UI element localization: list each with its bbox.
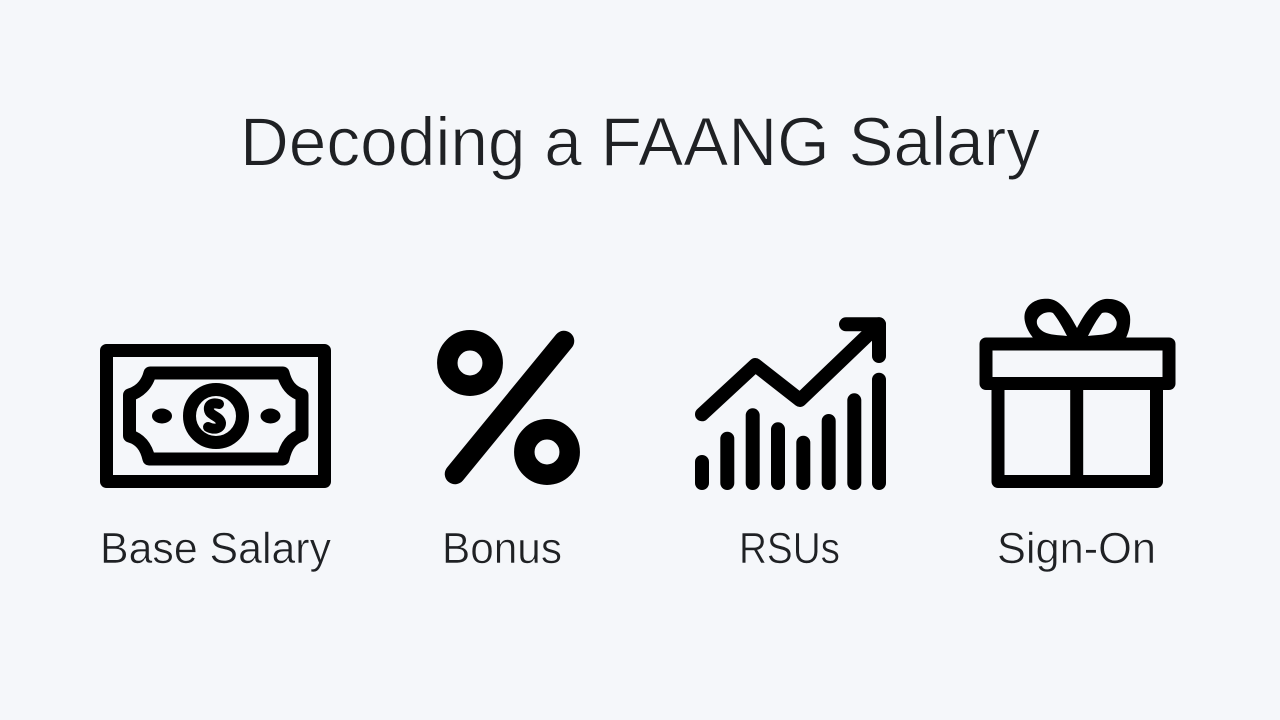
label: base salary: Base Salary — [100, 524, 331, 573]
icon: gift box for sign-on — [986, 299, 1169, 482]
title: Decoding a FAANG Salary — [240, 104, 1040, 180]
icon: banknote for base salary — [106, 350, 324, 482]
label: sign-on: Sign-On — [997, 524, 1156, 573]
label: bonus: Bonus — [442, 524, 562, 573]
icon: percent sign for bonus — [447, 340, 570, 475]
label: RSUs: RSUs — [739, 524, 840, 573]
icon: rising chart for RSUs — [702, 324, 879, 483]
